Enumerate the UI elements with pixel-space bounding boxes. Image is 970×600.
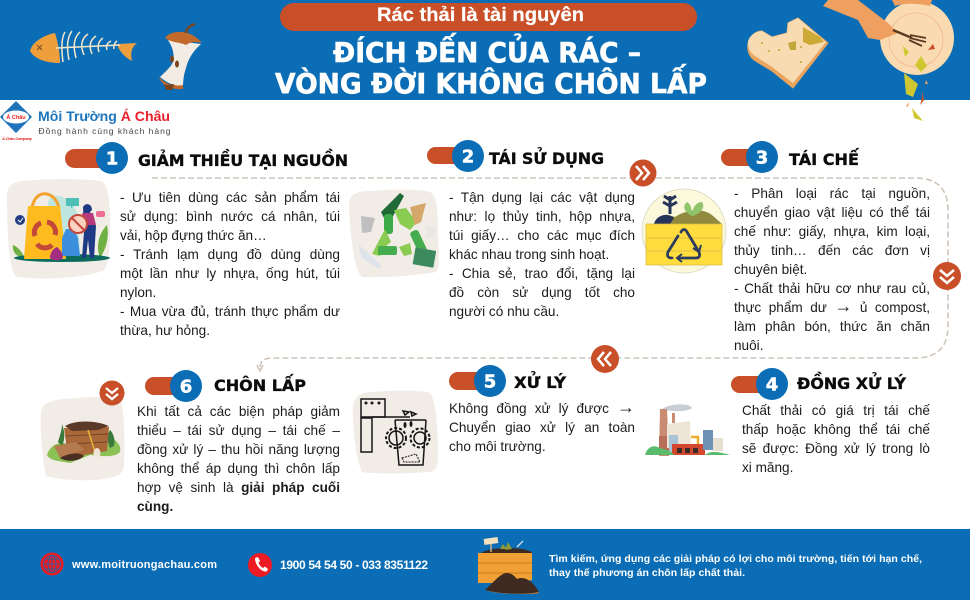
icon: phone — [248, 553, 272, 577]
text: step 3: thực phẩm dư → ủ compost, — [734, 296, 930, 316]
step 4 badge and heading — [731, 368, 906, 400]
illustration: compost bin panel — [41, 397, 124, 480]
text: step 6: cùng. — [137, 499, 173, 514]
arrow badge: left — [591, 345, 619, 373]
text: step 1 — [120, 190, 340, 338]
text: step 6: hợp vệ sinh là giải pháp cuối — [137, 480, 340, 495]
text: step 3: - Chất thải hữu cơ như rau củ, — [734, 281, 930, 296]
text: step 4: xi măng. — [742, 460, 793, 475]
header band — [0, 0, 970, 100]
illustration: factory — [645, 404, 730, 456]
step 5 badge and heading — [449, 365, 566, 397]
text: step 3 — [734, 186, 930, 353]
text: step 5: Chuyển giao xử lý an toàn — [449, 420, 635, 435]
logo: Đồng hành cùng khách hàng — [38, 126, 171, 136]
logo: Môi Trường Á Châu — [38, 108, 170, 124]
step 1 badge and heading: 1 — [106, 148, 118, 170]
text: step 3: - Phân loại rác tại nguồn, — [734, 186, 930, 201]
step 2 badge and heading: 2 — [462, 146, 474, 168]
icon: bitten bread — [748, 18, 828, 88]
icon: fish bone — [30, 31, 137, 63]
text: step 1: - Tránh lạm dụng đồ dùng dùng — [120, 247, 340, 262]
icon: globe — [40, 552, 64, 576]
footer message: Tìm kiếm, ứng dụng các giải pháp có lợi cho môi trường, tiến tới hạn chế, — [549, 553, 922, 565]
footer message — [549, 553, 922, 579]
step 6 badge and heading — [145, 370, 306, 402]
text: step 4 — [742, 403, 930, 475]
step 2 badge and heading: TÁI SỬ DỤNG — [489, 147, 604, 168]
step 6 badge and heading: 6 — [180, 376, 192, 398]
step 3 badge and heading: TÁI CHẾ — [789, 148, 859, 169]
step 4 badge and heading: 4 — [766, 374, 778, 396]
text: step 1: - Mua vừa đủ, tránh thực phẩm dư — [120, 304, 340, 319]
text: step 2: - Tận dụng lại các vật dụng — [449, 190, 635, 205]
illustration: reusable bag panel — [7, 179, 110, 279]
text: step 5: cho môi trường. — [449, 439, 546, 454]
step 1 badge and heading — [65, 142, 348, 174]
text: step 3: chế như: giấy, nhựa, kim loại, — [734, 224, 930, 239]
text: step 3: thủy tinh… đến các đơn vị — [734, 243, 930, 258]
step 5 badge and heading: XỬ LÝ — [514, 371, 566, 392]
text: step 4: sẽ được: Đồng xử lý trong lò — [742, 441, 930, 456]
title: VÒNG ĐỜI KHÔNG CHÔN LẤP — [275, 62, 707, 100]
icon: plate with hand and fork — [823, 0, 954, 121]
text: step 1: thừa, hư hỏng. — [120, 323, 210, 338]
arrow badge: down right side — [933, 262, 961, 290]
text: step 2: túi giấy… cho các mục đích — [449, 228, 635, 243]
text: step 2: người có nhu cầu. — [449, 304, 559, 319]
text: step 2: - Chia sẻ, trao đổi, tặng lại — [449, 266, 635, 281]
logo: Á Châu — [6, 114, 26, 121]
text: step 6: Khi tất cả các biện pháp giảm — [137, 404, 340, 419]
title — [275, 31, 707, 100]
text: step 2: như: lọ thủy tinh, hộp nhựa, — [449, 209, 635, 224]
text: step 2 — [449, 190, 635, 319]
text: step 2: đồ còn sử dụng tốt cho — [449, 285, 635, 300]
step 2 badge and heading — [427, 140, 604, 172]
text: step 1: sử dụng: bình nước cá nhân, túi — [120, 209, 340, 224]
text: step 3: làm phân bón, thức ăn chăn — [734, 319, 930, 334]
subtitle pill — [280, 3, 697, 31]
logo: Á Châu Company — [1, 136, 33, 141]
step 6 badge and heading: CHÔN LẤP — [214, 374, 306, 395]
text: step 5: Không đồng xử lý được → — [449, 397, 635, 417]
text: step 6: không thể áp dụng thì chôn lấp — [137, 461, 340, 476]
arrow badge: down left side — [100, 380, 124, 406]
logo — [0, 101, 171, 141]
subtitle pill: Rác thải là tài nguyên — [377, 5, 584, 26]
text: step 1: - Ưu tiên dùng các sản phẩm tái — [120, 190, 340, 205]
arrow badge: right — [630, 160, 656, 186]
footer band — [0, 529, 970, 600]
footer phone number: 1900 54 54 50 - 033 8351122 — [280, 558, 428, 572]
text: step 6 — [137, 404, 340, 514]
text: step 1: nylon. — [120, 285, 156, 300]
text: step 3: chuyển giao vật liệu có thể tái — [734, 205, 930, 220]
text: step 1: vải, hộp đựng thức ăn… — [120, 228, 267, 243]
step 3 badge and heading: 3 — [756, 148, 768, 168]
step 4 badge and heading: ĐỒNG XỬ LÝ — [797, 371, 906, 393]
dashed process path — [152, 178, 948, 371]
illustration: treatment machine panel — [353, 391, 438, 474]
text: step 2: khác nhau trong sinh hoạt. — [449, 247, 609, 262]
text: step 6: thiểu – tái sử dụng – tái chế – — [137, 423, 340, 438]
step 1 badge and heading: GIẢM THIỀU TẠI NGUỒN — [138, 148, 348, 170]
text: step 4: Chất thải có giá trị tái chế — [742, 403, 930, 418]
title: ĐÍCH ĐẾN CỦA RÁC – — [333, 31, 641, 69]
text: step 1: một lần như ly nhựa, ống hút, túi — [120, 266, 340, 281]
text: step 3: nuôi. — [734, 338, 763, 353]
illustration: reuse recycling panel — [349, 190, 439, 277]
illustration: recycling crate circle — [642, 189, 726, 273]
step 5 badge and heading: 5 — [484, 372, 496, 392]
text: step 4: thấp hoặc không thể tái chế — [742, 422, 930, 437]
text: step 5 — [449, 397, 635, 454]
icon: compost crate — [478, 537, 539, 594]
step 3 badge and heading — [721, 141, 859, 173]
footer website: www.moitruongachau.com — [71, 559, 217, 571]
icon: apple core — [159, 24, 202, 90]
text: step 6: đồng xử lý – thu hồi năng lượng — [137, 442, 340, 457]
footer message: thay thế phương án chôn lấp chất thải. — [549, 567, 745, 579]
text: step 3: chuyên biệt. — [734, 262, 807, 277]
